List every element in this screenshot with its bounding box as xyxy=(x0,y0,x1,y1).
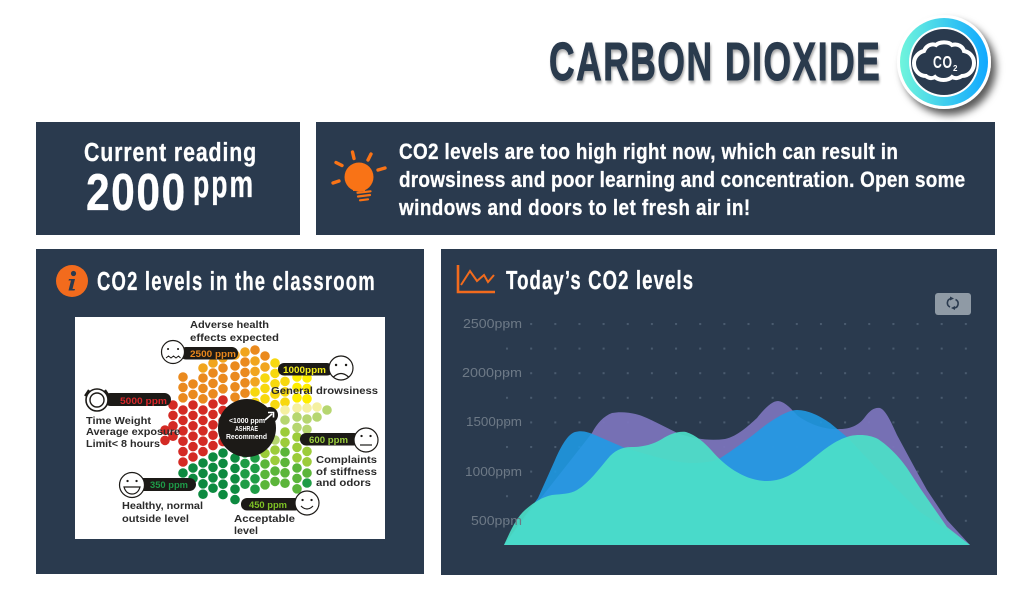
callout: 1000 ppm: 1000ppm xyxy=(283,365,326,375)
advice text: windows and doors to let fresh air in! xyxy=(398,196,750,220)
panel: advice message xyxy=(316,122,995,235)
ASHRAE recommendation blob: <1000 ppm xyxy=(229,418,265,425)
y-axis labels: 2500ppm xyxy=(463,316,522,331)
icon: CO2 cloud badge: 2 xyxy=(953,64,958,73)
callout: 5000 ppm: Time Weight xyxy=(86,416,152,427)
title: CARBON DIOXIDE xyxy=(549,31,880,92)
callout: 600 ppm xyxy=(300,428,378,489)
area: blue series xyxy=(504,410,970,545)
callout: 5000 ppm: Average exposure xyxy=(86,427,180,438)
panel: today's CO2 levels xyxy=(441,249,997,575)
callout: 600 ppm: 600 ppm xyxy=(309,435,348,445)
ASHRAE recommendation blob: Recommend xyxy=(226,434,267,441)
heading: current reading: Current reading xyxy=(84,138,256,168)
ASHRAE recommendation blob: ASHRAE xyxy=(235,426,258,433)
heading: today's levels: Today’s CO2 levels xyxy=(506,266,693,295)
callout: 350 ppm: outside level xyxy=(122,514,189,525)
y-axis labels: 1500ppm xyxy=(466,414,522,429)
advice text: CO2 levels are too high right now, which can result in xyxy=(399,140,898,164)
panel: current reading xyxy=(36,122,300,235)
callout: 5000 ppm: 5000 ppm xyxy=(120,396,167,406)
advice text: drowsiness and poor learning and concentration. Open some xyxy=(399,168,965,192)
reading value: 2000 xyxy=(86,164,185,222)
callout: 1000 ppm xyxy=(271,356,378,397)
callout: 2500 ppm: Adverse health xyxy=(190,320,269,331)
callout: 450 ppm xyxy=(234,491,319,537)
chart: CO2 effects honeycomb xyxy=(75,317,385,539)
y-axis labels xyxy=(462,316,522,528)
callout: 600 ppm: Complaints xyxy=(316,455,377,466)
callout: 450 ppm: level xyxy=(234,526,258,537)
callout: 600 ppm: of stiffness xyxy=(316,467,377,478)
icon: line chart xyxy=(458,265,495,292)
callout: 450 ppm: 450 ppm xyxy=(249,500,287,510)
honeycomb dots xyxy=(165,350,327,503)
callout: 2500 ppm: 2500 ppm xyxy=(190,349,236,359)
icon: CO2 cloud badge xyxy=(897,15,991,109)
callout: 450 ppm: Acceptable xyxy=(234,514,295,525)
icon: light bulb xyxy=(333,152,385,200)
callout: 1000 ppm: General drowsiness xyxy=(271,386,378,397)
area: teal series xyxy=(504,432,970,545)
area: purple series xyxy=(504,401,970,545)
chart: area chart of CO2 levels xyxy=(462,316,970,545)
panel: CO2 levels in the classroom xyxy=(36,249,424,574)
callout: 5000 ppm xyxy=(85,389,180,450)
callout: 350 ppm: 350 ppm xyxy=(150,480,188,490)
icon: CO2 cloud badge: CO xyxy=(933,53,952,73)
callout: 5000 ppm: Limit< 8 hours xyxy=(86,439,160,450)
callout: 600 ppm: and odors xyxy=(316,478,371,489)
advice text xyxy=(398,140,965,220)
callout: 350 ppm xyxy=(120,472,203,525)
ASHRAE recommendation blob xyxy=(218,399,278,457)
y-axis labels: 2000ppm xyxy=(462,365,522,380)
button: refresh xyxy=(935,293,971,315)
y-axis labels: 1000ppm xyxy=(465,464,522,479)
callout: 350 ppm: Healthy, normal xyxy=(122,501,203,512)
y-axis labels: 500ppm xyxy=(471,513,522,528)
callout: 2500 ppm: effects expected xyxy=(190,333,279,344)
icon: info xyxy=(56,265,88,297)
heading: classroom levels: CO2 levels in the classroom xyxy=(97,267,375,296)
dot grid xyxy=(505,322,969,544)
callout: 2500 ppm xyxy=(162,320,279,364)
reading unit: ppm xyxy=(193,162,253,205)
